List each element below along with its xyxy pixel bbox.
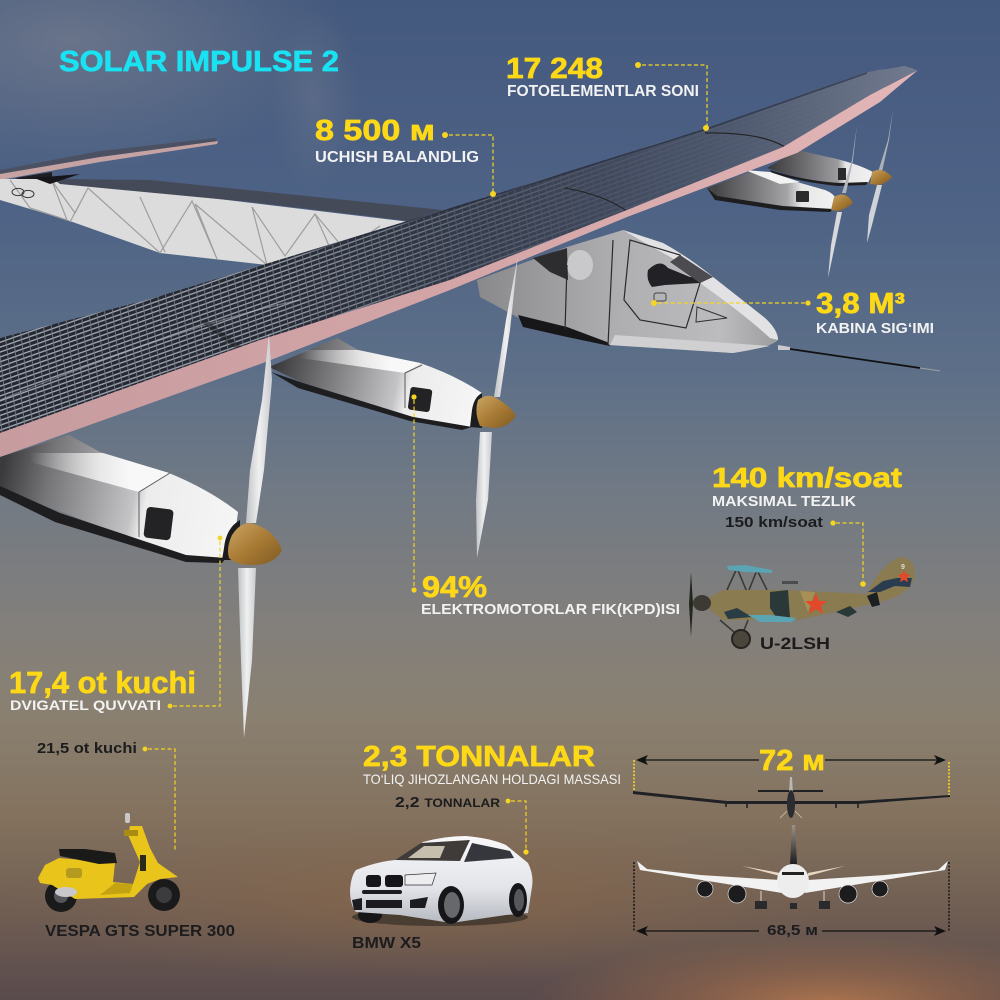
- tail number: 9: [901, 564, 905, 571]
- tail: horizontal stabiliser tip: [0, 138, 218, 182]
- front wheel: [148, 879, 180, 911]
- callout: engine power: DVIGATEL QUVVATI: [10, 697, 161, 713]
- callout: solar cells: FOTOELEMENTLAR SONI: [507, 83, 699, 100]
- wheel: [732, 630, 750, 648]
- Solar Impulse 2 aircraft: [0, 60, 940, 738]
- upper wing: [727, 565, 772, 573]
- callout: mass: [363, 741, 621, 855]
- shadow: [352, 908, 528, 926]
- headlights: [405, 873, 436, 885]
- fuselage pod / cockpit: [477, 230, 778, 353]
- callout: cabin volume: KABINA SIG‘IMI: [816, 320, 934, 337]
- main wing: pink leading edge: [0, 70, 918, 457]
- dimension 72 m: 72 м: [759, 745, 825, 777]
- mirror: [125, 813, 130, 823]
- callout: mass: 2,2 TONNALAR: [395, 794, 501, 811]
- callout: altitude: [315, 115, 496, 197]
- lower wing: [748, 615, 796, 622]
- body: [350, 836, 532, 923]
- callout: motor efficiency: [411, 394, 680, 618]
- middle engine nacelle: [269, 255, 518, 558]
- callout: altitude: 8 500 м: [315, 115, 435, 147]
- main wing: solar panels: [0, 60, 920, 440]
- left engine nacelle: [0, 333, 282, 738]
- callout: scooter power: 21,5 ot kuchi: [37, 741, 137, 757]
- engine: [693, 595, 711, 611]
- callout: altitude: UCHISH BALANDLIG: [315, 149, 479, 166]
- propeller: [689, 572, 693, 637]
- rear wheel: [45, 880, 77, 912]
- callout: max speed: MAKSIMAL TEZLIK: [712, 493, 856, 510]
- callout: max speed: [712, 462, 902, 587]
- windshield: [395, 840, 470, 861]
- red star tail: [898, 570, 910, 582]
- callout: engine power: [9, 536, 222, 713]
- title: SOLAR IMPULSE 2: [59, 46, 339, 78]
- front wheel: [438, 886, 464, 924]
- callout: mass: 2,3 TONNALAR: [363, 741, 595, 773]
- engine cover: [55, 887, 77, 897]
- fuselage: [710, 557, 915, 620]
- callout: scooter power: [37, 741, 175, 852]
- gun: [782, 581, 798, 584]
- label: Vespa: VESPA GTS SUPER 300: [45, 923, 235, 940]
- nose probe: [778, 345, 940, 371]
- seat: [59, 849, 117, 864]
- bumper vents: [352, 890, 428, 910]
- callout: max speed: 140 km/soat: [712, 462, 902, 493]
- callout: motor efficiency: ELEKTROMOTORLAR FIK(KPD)ISI: [421, 602, 680, 618]
- far wheel: [358, 907, 382, 923]
- struts and gear: [720, 568, 767, 638]
- callout: motor efficiency: 94%: [422, 571, 487, 604]
- body: [38, 826, 178, 899]
- side windows: [464, 843, 514, 862]
- airliner front silhouette: [637, 825, 948, 909]
- Solar Impulse front silhouette: [633, 777, 950, 818]
- label: U-2LSH: U-2LSH: [760, 634, 830, 653]
- callout: cabin volume: [651, 288, 934, 337]
- rear wheel: [509, 883, 527, 917]
- BMW X5 car: [350, 836, 532, 926]
- red star fuselage: [805, 593, 827, 614]
- label: BMW: BMW X5: [352, 935, 421, 952]
- right far engine nacelles: [707, 110, 893, 278]
- callout: solar cells: [506, 53, 709, 131]
- Vespa scooter: [38, 813, 180, 912]
- dimension 72 m: [634, 745, 949, 795]
- callout: engine power: 17,4 ot kuchi: [9, 665, 196, 700]
- callout: max speed: 150 km/soat: [725, 514, 823, 531]
- dimension 68,5 m: [634, 862, 949, 939]
- callout: cabin volume: 3,8 М³: [816, 288, 905, 320]
- tail: truss boom: [0, 174, 460, 265]
- U-2LSH biplane: [689, 557, 915, 648]
- callout: mass: TO‘LIQ JIHOZLANGAN HOLDAGI MASSASI: [363, 771, 621, 787]
- wingspan comparison: [633, 745, 950, 939]
- callout: solar cells: 17 248: [506, 53, 603, 85]
- dimension 68,5 m: 68,5 м: [767, 922, 818, 939]
- grille: [366, 875, 403, 887]
